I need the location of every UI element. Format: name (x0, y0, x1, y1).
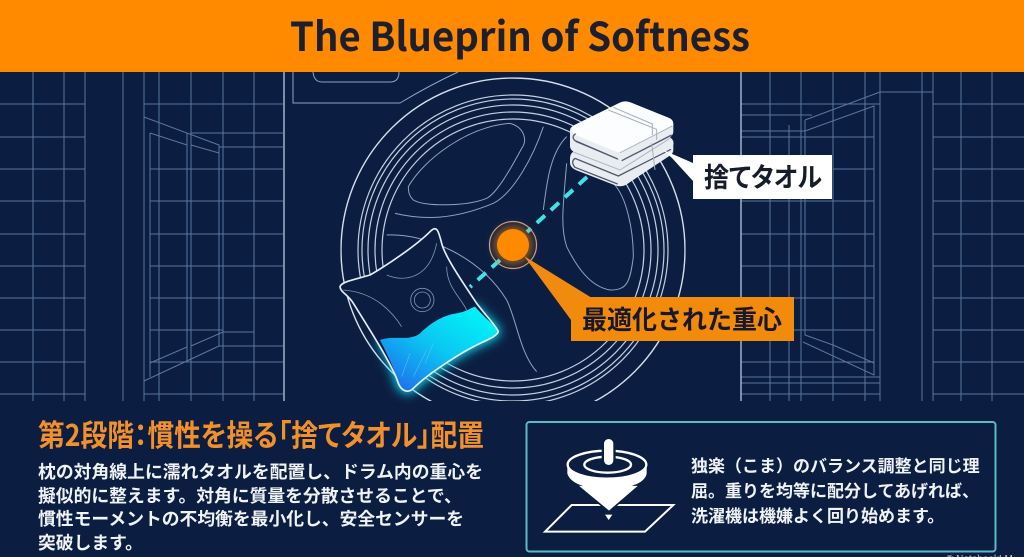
icon: spinning top (545, 437, 673, 532)
body text: 突破します。 (38, 529, 143, 555)
label: optimized center of gravity: 最適化された重心 (582, 300, 782, 337)
title banner (0, 0, 1024, 72)
label: sacrificial towel: 捨てタオル (704, 156, 822, 195)
callout wedge: center of gravity (524, 256, 592, 320)
icon: center of gravity marker (490, 222, 536, 268)
analogy text: 屈。重りを均等に配分してあげれば、 (691, 477, 979, 502)
body text: 慣性モーメントの不均衡を最小化し、安全センサーを (38, 505, 464, 531)
title banner: The Blueprin of Softness (290, 5, 750, 63)
body text (38, 458, 483, 555)
analogy text (691, 452, 980, 527)
callout wedge: towel (663, 150, 693, 181)
drum: concentric circles and spokes (341, 78, 685, 422)
dashed balance line (470, 177, 587, 287)
body text: 枕の対角線上に濡れタオルを配置し、ドラム内の重心を (38, 458, 483, 484)
icon: stacked towels (570, 101, 674, 186)
analogy text: 洗濯機は機嫌よく回り始めます。 (691, 502, 944, 527)
icon: wet pillow (340, 229, 498, 391)
panel: spinning top analogy (526, 422, 996, 552)
body text: 擬似的に整えます。対角に質量を分散させることで、 (38, 482, 462, 508)
analogy text: 独楽（こま）のバランス調整と同じ理 (691, 452, 980, 477)
heading: stage 2: 第2段階：慣性を操る「捨てタオル」配置 (38, 411, 484, 455)
